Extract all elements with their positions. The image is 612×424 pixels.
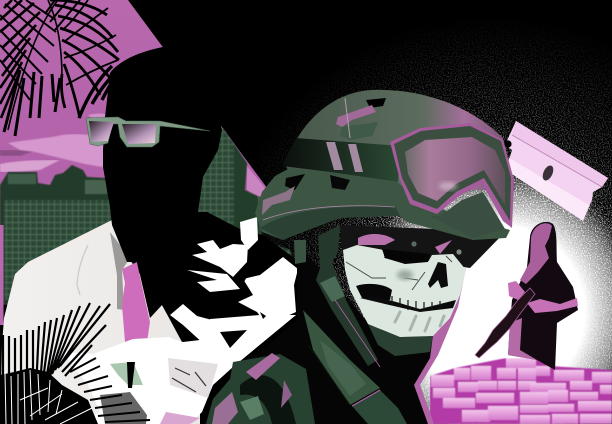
soldier: goggle lens [394,126,511,221]
cocaine bricks pile [430,358,612,424]
plant: mid leaf [170,304,212,345]
guard: left hand [508,281,525,300]
soldier: black body [204,245,433,424]
guard: trouser fold [508,318,537,360]
plant: upper spray [192,240,248,277]
buildings skyline [0,128,300,305]
plant: top leaf [240,217,258,250]
man: black silhouette [103,46,300,358]
guard: body [508,222,578,370]
white flowering plant [62,217,298,424]
man: pink tie [122,262,150,342]
masked man [0,46,300,424]
guard: rifle [475,288,535,358]
sky panel with clouds [0,0,270,250]
soldier: goggle lens tint [405,137,505,205]
plant: connecting mass [150,315,296,424]
soldier: chin straps [316,225,378,366]
soldier: collar [303,310,380,405]
soldier: face skin [340,225,505,268]
razor blade [504,121,608,221]
soldier: dome camo [336,98,386,140]
soldier: goggle strap [282,138,400,182]
man: suit jacket [0,220,200,424]
armed guard figure [475,222,578,370]
guard: hood and scarf [520,223,552,284]
soldier: goggle shadow [430,192,505,238]
soldier: helmet brim [255,168,510,240]
man: sunglasses [86,117,210,147]
palm bottom-left [0,303,150,424]
soldier: brim camo [262,174,350,215]
soldier: skull mask [343,245,466,337]
plant: right flower [238,257,298,325]
soldier: neck gaiter [367,322,433,356]
man: left pink strip [0,225,4,325]
man: lapel crease [77,245,88,295]
plant: lower flowers [62,337,213,424]
guard: forearm and hand [527,298,578,313]
soldier: helmet dome [285,90,515,190]
soldier [204,90,515,424]
soldier: goggle frame [390,123,514,228]
soldier: pink rim on right edge [396,268,466,424]
soldier: shoulder strap [206,353,315,424]
plant: holes [220,262,266,348]
background: speckled spotlight [242,28,612,424]
plant: second spray [187,270,240,292]
palm fronds top-left [0,0,119,136]
soldier: goggle highlight [439,182,457,190]
man: shirt collar [110,232,130,310]
